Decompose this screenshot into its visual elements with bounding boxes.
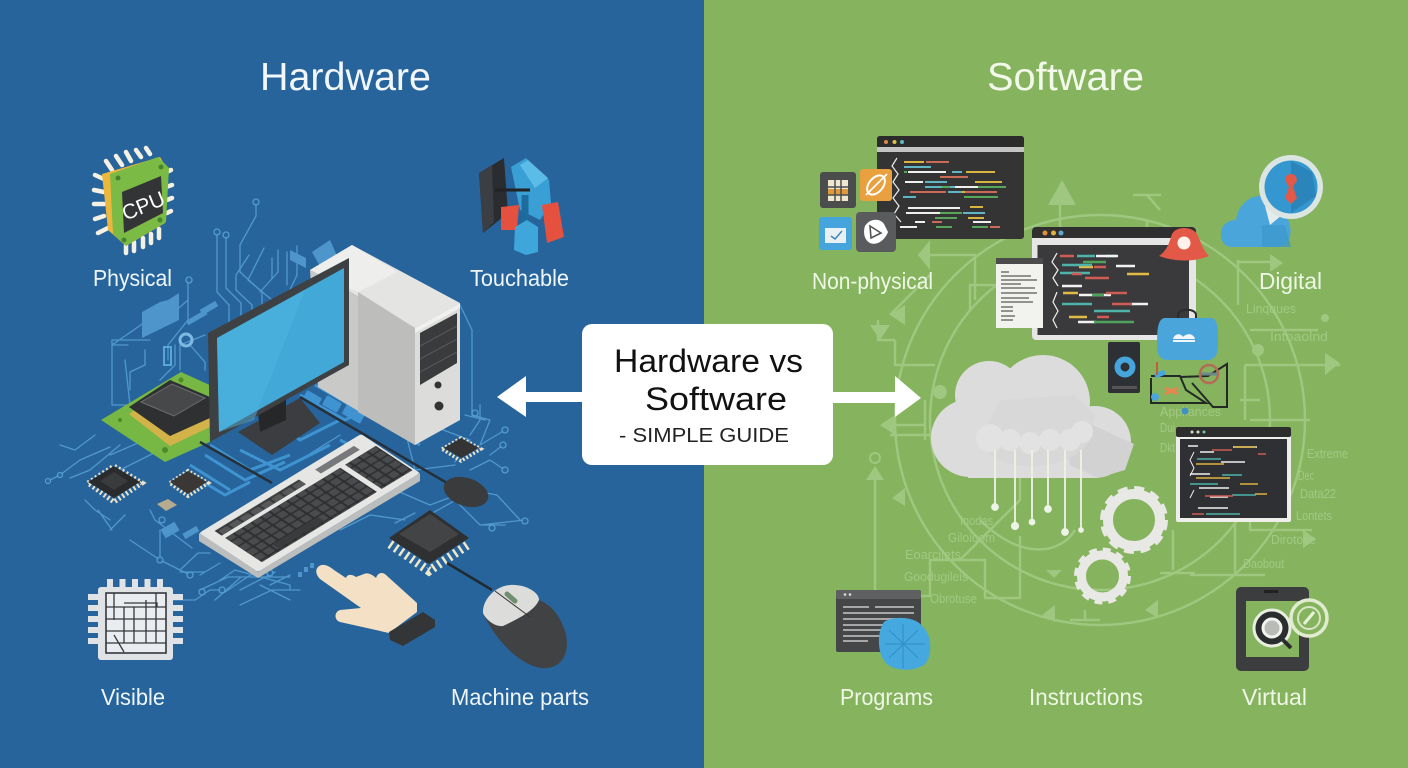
icon: touchable blocks (479, 158, 564, 255)
app icon: grey blob (856, 212, 896, 252)
label: Physical: Physical (93, 265, 172, 291)
key block: spacebar (272, 517, 324, 548)
faint background labels: Daobout (1243, 556, 1284, 571)
chip: large (389, 510, 469, 571)
arrow: to software (830, 376, 921, 417)
label: Non-physical: Non-physical (812, 268, 933, 294)
tower drive bays (420, 313, 457, 385)
monitor stand (238, 398, 320, 455)
panel: software background (704, 0, 1408, 768)
faint background labels: Eoarcilets (905, 547, 961, 562)
cable: tower to mouse (300, 397, 447, 483)
icon: circuit diagram (1151, 362, 1227, 414)
icon: virtual tablet with lens (1236, 587, 1327, 671)
pale circuit shapes (142, 240, 338, 577)
faint background labels: Goodugileis (904, 569, 968, 584)
illustration: keyboard (199, 434, 420, 578)
faint background labels: Dkt (1160, 440, 1175, 455)
key block: main (225, 468, 377, 562)
code window: lower right (1176, 427, 1291, 522)
label: Digital: Digital (1259, 268, 1322, 294)
icon: dark tablet with diamond (1108, 342, 1140, 393)
board traces under computer (190, 385, 420, 495)
faint background labels: Appliances (1160, 404, 1221, 419)
app icon: blue check (819, 217, 852, 250)
key block: numpad (345, 446, 412, 489)
circuit node dots (46, 199, 528, 595)
label: Instructions: Instructions (1029, 684, 1143, 710)
icon: small mouse (440, 472, 492, 512)
icon: pointing hand (316, 565, 435, 646)
icon: large gear (1104, 490, 1164, 550)
illustration: monitor (208, 258, 349, 455)
title line: Hardware vs: Hardware vs (614, 343, 803, 379)
app icon: grid (820, 172, 856, 208)
code window: top (877, 136, 1024, 239)
label: Virtual: Virtual (1242, 684, 1307, 710)
faint background labels: Data22 (1300, 486, 1336, 501)
label: Programs: Programs (840, 684, 933, 710)
faint background labels: Intoaolnd (1270, 329, 1328, 344)
cable: chip to big mouse (447, 563, 492, 590)
icon: digital cloud and keyhole (1221, 155, 1323, 247)
cloud data drips (992, 450, 1083, 535)
subtitle: - SIMPLE GUIDE (619, 425, 789, 447)
code window: centre (1032, 227, 1196, 340)
heading: Hardware: Hardware (260, 56, 431, 99)
faint background labels: Giloioom (948, 530, 995, 545)
icon: programs window with blue disc (836, 590, 930, 670)
illustration: tower case (310, 245, 460, 445)
icon: blue bag (1157, 310, 1218, 360)
key block: indicators (315, 446, 360, 473)
illustration: green circuit board with chip (101, 372, 214, 462)
faint background labels: Dec (1298, 468, 1314, 483)
faint background labels: Lontets (1296, 508, 1332, 523)
centre title card (582, 324, 833, 465)
faint background labels: Extreme (1307, 446, 1348, 461)
faint background labels: Dui (1160, 420, 1175, 435)
faint background labels: Dirotose (1271, 532, 1316, 547)
faint background labels: Obrotuse (930, 591, 977, 606)
icon: red pin (1159, 228, 1209, 260)
panel: hardware background (0, 0, 704, 768)
decorative tan component (157, 499, 177, 511)
icon: small gear (1078, 551, 1128, 601)
circuit traces background (48, 203, 525, 605)
icon: CPU chip: CPU (119, 187, 168, 225)
monitor screen (217, 268, 344, 432)
app icon: orange orbit (860, 169, 892, 201)
illustration: grey cloud (931, 355, 1134, 535)
faint background labels (904, 301, 1348, 606)
chip: right (442, 438, 481, 461)
icon: CPU chip (94, 148, 172, 253)
faint background labels: Linqques (1246, 301, 1296, 316)
label: Touchable: Touchable (470, 265, 569, 291)
label: Machine parts: Machine parts (451, 684, 589, 710)
code window: paper sheet (996, 258, 1043, 328)
pale arrowheads and nodes (866, 180, 1340, 622)
chip: middle (170, 471, 208, 496)
network background on software side (875, 195, 1340, 625)
title line: Software: Software (645, 381, 787, 417)
faint background labels: Inodas (960, 513, 993, 528)
cable: monitor to keyboard (200, 442, 272, 483)
heading: Software: Software (987, 56, 1144, 99)
icon: large mouse (483, 585, 567, 668)
label: Visible: Visible (101, 684, 165, 710)
icon: visible chip grid (88, 579, 183, 660)
chip: left (88, 466, 142, 502)
arrow: to hardware (497, 376, 585, 417)
key block: function row (215, 479, 306, 536)
